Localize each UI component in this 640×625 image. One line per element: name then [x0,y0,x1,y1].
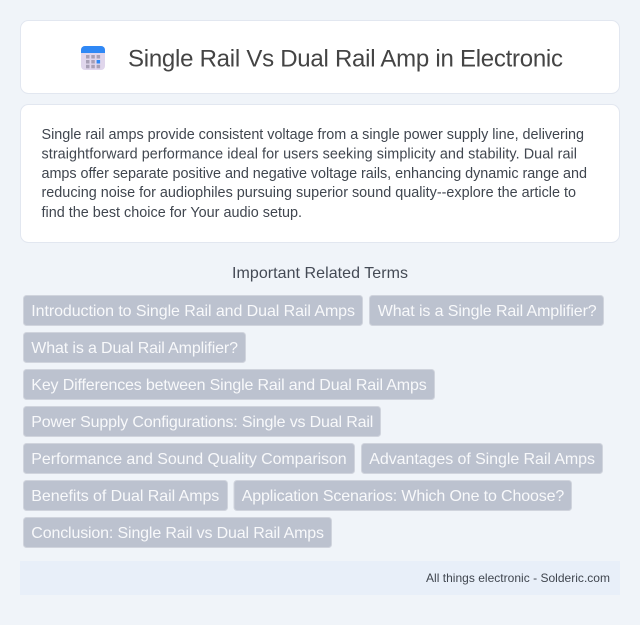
description text: reducing noise for audiophiles pursuing superior sound quality--explore the article to [42,185,576,201]
footer bar [20,561,620,595]
tag: performance [24,444,354,474]
tag: application scenarios [234,480,572,510]
tag: single rail amplifier [370,296,604,326]
description text: Single rail amps provide consistent voltage from a single power supply line, delivering [42,127,584,143]
description text: straightforward performance ideal for users seeking simplicity and stability. Dual rail [42,146,577,162]
tag: advantages [362,444,602,474]
tag: power supply: Power Supply Configurations: Single vs Dual Rail [31,414,373,431]
tag: dual rail amplifier: What is a Dual Rail Amplifier? [31,340,238,357]
tag: single rail amplifier: What is a Single Rail Amplifier? [378,303,597,320]
tag: conclusion [24,518,332,548]
tag: dual rail amplifier [24,332,246,362]
tag: application scenarios: Application Scenarios: Which One to Choose? [242,488,564,505]
panel: description [20,104,620,242]
related terms tags [24,296,604,548]
tag: benefits [24,480,228,510]
tag: benefits: Benefits of Dual Rail Amps [31,488,219,505]
tag: conclusion: Conclusion: Single Rail vs Dual Rail Amps [31,525,324,542]
tag: power supply [24,406,380,436]
description text [42,127,587,221]
header panel [20,20,620,94]
title: Single Rail Vs Dual Rail Amp in Electronic [128,46,563,72]
tag: key differences: Key Differences between Single Rail and Dual Rail Amps [31,377,427,394]
tag: introduction: Introduction to Single Rail and Dual Rail Amps [31,303,355,320]
heading: important related terms: Important Related Terms [232,265,408,282]
tag: key differences [24,370,434,400]
icon: calendar grid [81,46,105,70]
footer text: All things electronic - Solderic.com [426,571,610,585]
description text: find the best choice for Your audio setup. [42,205,302,221]
tag: performance: Performance and Sound Quality Comparison [31,451,347,468]
description text: amps offer separate positive and negative voltage rails, enhancing dynamic range and [42,166,587,182]
tag: introduction [24,296,362,326]
tag: advantages: Advantages of Single Rail Amps [369,451,595,468]
